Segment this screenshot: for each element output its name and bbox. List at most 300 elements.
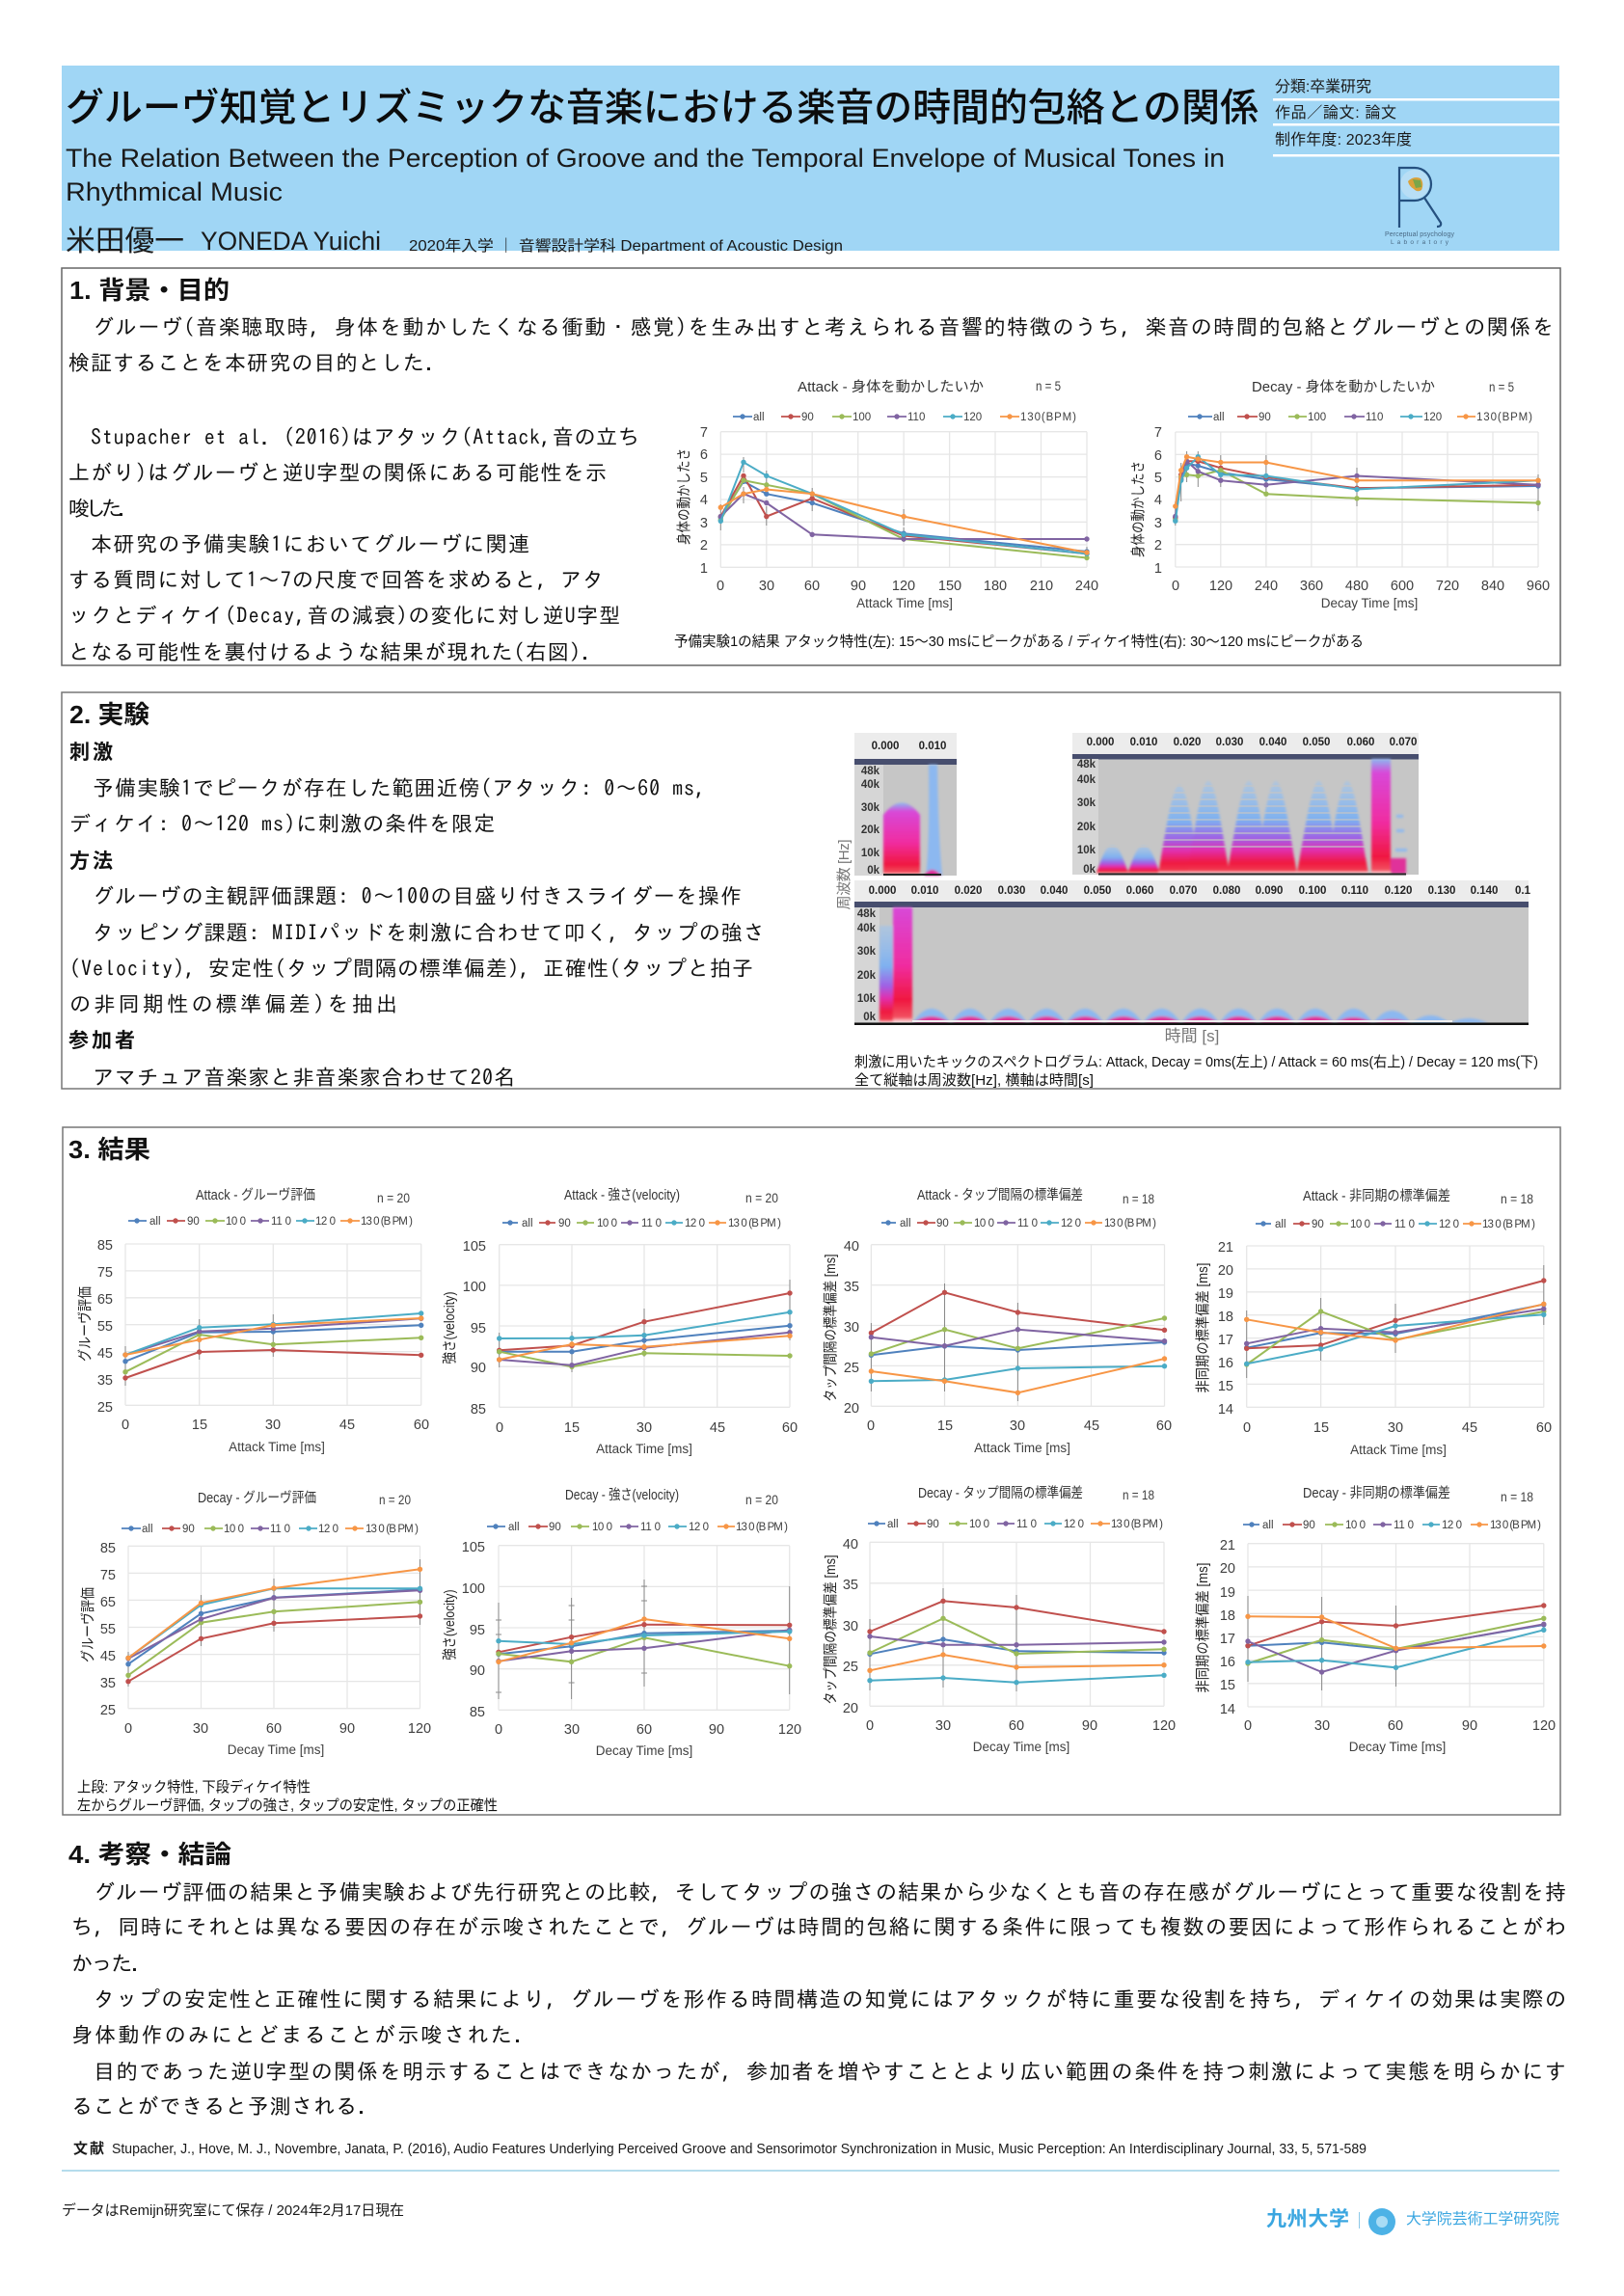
line chart: decay pilot: 110 xyxy=(1366,412,1383,423)
text block: discussion: 身体動作のみにとどまることが示唆された. xyxy=(71,2024,525,2045)
spectrogram: decay 120 ms: 40k xyxy=(857,923,877,934)
line chart: decay asynchrony SD: Decay - 非同期の標準偏差 xyxy=(1303,1485,1450,1501)
line chart: decay pilot: 240 xyxy=(1255,579,1278,594)
line chart: attack pilot: 2 xyxy=(700,538,708,554)
text block: discussion: 目的であった逆U字型の関係を明示することはできなかったが, 参加者を増やすこととより広い範囲の条件を持つ刺激によって実態を明らかにす xyxy=(94,2061,1566,2082)
line chart: attack pilot: Attack Time [ms] xyxy=(856,596,953,610)
text block: stimuli: 刺激 xyxy=(69,737,113,766)
spectrogram: attack 60 ms: 0.050 xyxy=(1303,737,1330,748)
line chart: attack pilot: n = 5 xyxy=(1036,378,1061,393)
line chart: decay groove rating: 90 xyxy=(339,1721,355,1737)
spectrogram: decay 120 ms: 0.070 xyxy=(1170,885,1197,897)
spectrogram: attack 60 ms: 40k xyxy=(1077,774,1096,786)
line chart: decay asynchrony SD: n = 18 xyxy=(1501,1489,1533,1504)
line chart: decay tap interval SD: all xyxy=(887,1519,899,1530)
meta list: 分類:卒業研究 xyxy=(1275,78,1371,95)
line chart: attack asynchrony SD: 16 xyxy=(1218,1356,1233,1371)
spectrogram: decay 120 ms: 0.010 xyxy=(911,885,938,897)
line chart: decay velocity: 強さ(velocity) xyxy=(442,1589,458,1661)
line chart: decay velocity: 90 xyxy=(549,1522,561,1533)
line chart: attack groove rating: 30 xyxy=(265,1418,281,1433)
line chart: attack tap interval SD: 25 xyxy=(844,1361,859,1376)
line chart: decay asynchrony SD: 20 xyxy=(1220,1561,1235,1577)
spectrogram: decay 120 ms: 48k xyxy=(857,908,877,920)
line chart: attack groove rating: 35 xyxy=(97,1373,113,1389)
line chart: decay velocity: 10 0 xyxy=(592,1522,612,1533)
line chart: decay velocity: 120 xyxy=(778,1722,801,1738)
line chart: decay groove rating: Decay Time [ms] xyxy=(228,1742,324,1757)
line chart: attack pilot: 90 xyxy=(801,412,814,423)
line chart: attack asynchrony SD: 30 xyxy=(1388,1420,1403,1436)
line chart: attack pilot: 0 xyxy=(717,579,724,594)
text block: prior research: ックとディケイ(Decay,音の減衰)の変化に対し逆U字型 xyxy=(68,605,620,626)
spectrogram: attack 60 ms: 0.030 xyxy=(1216,737,1243,748)
line chart: attack velocity: 105 xyxy=(463,1239,486,1255)
spectrogram: attack 60 ms: 10k xyxy=(1077,845,1096,856)
line chart: attack groove rating: 45 xyxy=(97,1346,113,1362)
line chart: attack groove rating: 90 xyxy=(187,1216,200,1228)
line chart: attack velocity: 60 xyxy=(782,1420,798,1436)
line chart: decay pilot: n = 5 xyxy=(1489,379,1514,394)
text block: prior research: Stupacher et al. (2016)はアタック(Attack,音の立ち xyxy=(91,426,639,447)
line chart: decay velocity: 30 xyxy=(564,1722,580,1738)
line chart: decay pilot: 2 xyxy=(1154,538,1162,554)
spectrogram: decay 120 ms: 0.060 xyxy=(1126,885,1153,897)
line chart: decay asynchrony SD: 30 xyxy=(1314,1718,1330,1734)
line chart: attack velocity: 15 xyxy=(564,1420,580,1436)
spectrogram: decay 120 ms: 0k xyxy=(863,1012,877,1023)
line chart: attack pilot: 150 xyxy=(938,579,961,594)
line chart: decay groove rating: 30 xyxy=(193,1721,208,1737)
heading: section 3: 3. 結果 xyxy=(68,1135,150,1164)
line chart: attack groove rating: n = 20 xyxy=(377,1190,410,1205)
line chart: decay groove rating: 75 xyxy=(100,1568,116,1583)
line chart: attack velocity: 12 0 xyxy=(685,1218,705,1229)
line chart: attack velocity: Attack - 強さ(velocity) xyxy=(564,1187,680,1203)
spectrogram: decay 120 ms: 0.090 xyxy=(1256,885,1283,897)
line chart: attack pilot: 110 xyxy=(907,412,925,423)
spectrogram: decay 120 ms: 0.030 xyxy=(998,885,1025,897)
line chart: attack pilot: 240 xyxy=(1075,579,1098,594)
author line: 2020年入学 ｜ 音響設計学科 Department of Acoustic Design xyxy=(409,237,843,255)
line chart: decay asynchrony SD: 12 0 xyxy=(1442,1520,1462,1531)
line chart: attack groove rating: 60 xyxy=(414,1418,429,1433)
line chart: attack tap interval SD: 11 0 xyxy=(1017,1218,1038,1229)
line chart: decay asynchrony SD: 10 0 xyxy=(1345,1520,1366,1531)
line chart: decay asynchrony SD: 90 xyxy=(1462,1718,1477,1734)
line chart: decay pilot xyxy=(1130,379,1550,610)
spectrogram: decay 120 ms: 0.000 xyxy=(869,885,896,897)
spectrogram: decay 120 ms: 0.100 xyxy=(1299,885,1326,897)
line chart: attack velocity: 強さ(velocity) xyxy=(442,1292,458,1364)
line chart: decay tap interval SD: n = 18 xyxy=(1123,1487,1154,1502)
author line xyxy=(66,217,843,259)
line chart: attack tap interval SD: 40 xyxy=(844,1239,859,1255)
author line: 米田優一 xyxy=(66,217,184,259)
spectrogram: attack decay 0 ms: 40k xyxy=(861,779,880,791)
english subtitle: The Relation Between the Perception of Groove and the Temporal Envelope of Musical Tones in xyxy=(66,144,1225,173)
spectrogram: attack 60 ms: 0.000 xyxy=(1087,737,1114,748)
meta list: 作品／論文: 論文 xyxy=(1275,104,1396,122)
line chart: attack groove rating: 13 0 (B PM ) xyxy=(361,1216,413,1228)
line chart: decay velocity: 90 xyxy=(709,1722,724,1738)
line chart: decay pilot: all xyxy=(1213,412,1225,423)
line chart: attack pilot: 90 xyxy=(851,579,866,594)
line chart: attack asynchrony SD: 21 xyxy=(1218,1240,1233,1256)
text block: discussion: タップの安定性と正確性に関する結果により, グルーヴを形作る時間構造の知覚にはアタックが特に重要な役割を持ち, ディケイの効果は実際の xyxy=(94,1988,1566,2010)
icon: Kyushu University logo: 九州大学 xyxy=(1266,2203,1349,2232)
spectrogram: decay 120 ms: 0.1 xyxy=(1515,885,1531,897)
line chart: attack groove rating: 10 0 xyxy=(226,1216,246,1228)
line chart: attack asynchrony SD: 0 xyxy=(1243,1420,1251,1436)
line chart: decay asynchrony SD: 0 xyxy=(1244,1718,1252,1734)
line chart: attack pilot: 身体の動かしたさ xyxy=(676,448,692,545)
line chart: decay groove rating: グルーヴ評価 xyxy=(80,1587,96,1662)
line chart: attack pilot: 130(BPM) xyxy=(1020,412,1076,423)
text block: prior research: する質問に対して1〜7の尺度で回答を求めると, アタ xyxy=(68,569,604,590)
text block: discussion xyxy=(71,1881,1566,2117)
line chart: attack velocity: 10 0 xyxy=(597,1218,617,1229)
line chart: decay velocity xyxy=(442,1487,801,1758)
line chart: decay groove rating: n = 20 xyxy=(379,1492,411,1507)
line chart: attack velocity xyxy=(442,1187,798,1456)
panel: 1 background and purpose xyxy=(62,268,1560,665)
line chart: decay tap interval SD: 40 xyxy=(843,1537,858,1553)
line chart: decay groove rating: 25 xyxy=(100,1703,116,1718)
line chart: decay pilot: 5 xyxy=(1154,471,1162,486)
panel: 3 results xyxy=(63,1127,1560,1815)
line chart: attack pilot: 100 xyxy=(853,412,871,423)
line chart: decay pilot: 4 xyxy=(1154,493,1162,508)
line chart: decay tap interval SD: 30 xyxy=(935,1718,951,1734)
heading: section 4: 4. 考察・結論 xyxy=(68,1840,231,1869)
line chart: attack velocity: 11 0 xyxy=(641,1218,662,1229)
line chart: attack pilot: all xyxy=(753,412,765,423)
spectrogram: attack 60 ms: 30k xyxy=(1077,797,1096,809)
line chart: decay velocity: n = 20 xyxy=(745,1492,778,1507)
line chart: decay velocity: 95 xyxy=(470,1623,485,1638)
line chart: attack asynchrony SD: 11 0 xyxy=(1394,1219,1415,1230)
line chart: attack asynchrony SD: 非同期の標準偏差 [ms] xyxy=(1195,1263,1211,1392)
line chart: attack pilot: 7 xyxy=(700,425,708,441)
line chart: decay groove rating: 13 0 (B PM ) xyxy=(365,1524,419,1535)
line chart: attack tap interval SD: 45 xyxy=(1084,1418,1099,1434)
spectrogram: decay 120 ms: 10k xyxy=(857,993,877,1005)
text block: participants xyxy=(68,1025,515,1088)
line chart: decay velocity: 0 xyxy=(495,1722,502,1738)
english subtitle xyxy=(66,144,1225,206)
line chart: attack groove rating: 75 xyxy=(97,1265,113,1281)
line chart: decay asynchrony SD: 21 xyxy=(1220,1538,1235,1553)
line chart: decay groove rating: 0 xyxy=(124,1721,132,1737)
references: Stupacher, J., Hove, M. J., Novembre, Janata, P. (2016), Audio Features Underlying Perceived Groove and Sensorimotor Synchronization in Music, Music Perception: An Interdisciplinary Journal, 33, 5, 571-589 xyxy=(112,2141,1367,2157)
line chart: attack velocity: 100 xyxy=(463,1280,486,1295)
line chart: decay asynchrony SD: 19 xyxy=(1220,1585,1235,1601)
line chart: decay tap interval SD: 20 xyxy=(843,1701,858,1716)
caption: spectrogram: 全て縦軸は周波数[Hz], 横軸は時間[s] xyxy=(854,1072,1094,1089)
line chart: decay asynchrony SD: 90 xyxy=(1303,1520,1315,1531)
spectrogram: decay 120 ms: 0.110 xyxy=(1341,885,1368,897)
line chart: attack tap interval SD: 12 0 xyxy=(1061,1218,1081,1229)
panel: 2 experiment xyxy=(62,692,1560,1089)
spectrogram: attack decay 0 ms: 48k xyxy=(861,766,880,777)
line chart: attack asynchrony SD: 15 xyxy=(1218,1379,1233,1394)
line chart: attack asynchrony SD: 17 xyxy=(1218,1333,1233,1348)
spectrogram: attack decay 0 ms: 0k xyxy=(867,865,880,877)
spectrogram: decay 120 ms: 0.050 xyxy=(1084,885,1111,897)
line chart: decay groove rating: 85 xyxy=(100,1541,116,1556)
line chart: attack asynchrony SD: 13 0 (B PM ) xyxy=(1482,1219,1535,1230)
spectrogram: attack 60 ms: 48k xyxy=(1077,759,1096,770)
text block: discussion: ることができると予測される. xyxy=(71,2095,368,2117)
text block: method: 方法 xyxy=(69,846,113,875)
line chart: decay asynchrony SD: 非同期の標準偏差 [ms] xyxy=(1195,1562,1211,1693)
line chart: attack groove rating xyxy=(77,1187,429,1454)
spectrogram: attack decay 0 ms: 0.010 xyxy=(919,741,946,752)
spectrogram: attack 60 ms: 20k xyxy=(1077,822,1096,833)
text block: purpose xyxy=(68,316,1554,373)
line chart: attack pilot: 180 xyxy=(984,579,1007,594)
line chart: decay tap interval SD: 90 xyxy=(1082,1718,1097,1734)
line chart: attack tap interval SD xyxy=(823,1187,1172,1455)
line chart: attack groove rating: all xyxy=(149,1216,161,1228)
line chart: decay asynchrony SD: all xyxy=(1262,1520,1274,1531)
line chart: decay tap interval SD: 90 xyxy=(927,1519,939,1530)
line chart: decay groove rating: 55 xyxy=(100,1622,116,1637)
line chart: attack groove rating: グルーヴ評価 xyxy=(77,1286,94,1362)
meta list xyxy=(1273,78,1559,156)
line chart: decay asynchrony SD: 17 xyxy=(1220,1632,1235,1647)
line chart: decay groove rating xyxy=(80,1490,431,1757)
text block: prior research: 唆した. xyxy=(68,498,128,519)
line chart: attack tap interval SD: 15 xyxy=(937,1418,953,1434)
author line: YONEDA Yuichi xyxy=(201,227,381,256)
line chart: decay asynchrony SD: 15 xyxy=(1220,1678,1235,1693)
line chart: decay velocity: 60 xyxy=(636,1722,652,1738)
line chart: decay groove rating: 45 xyxy=(100,1649,116,1664)
line chart: attack tap interval SD: タップ間隔の標準偏差 [ms] xyxy=(823,1254,839,1402)
spectrogram: decay 120 ms: 20k xyxy=(857,970,877,982)
icon: Kyushu University logo: 大学院芸術工学研究院 xyxy=(1406,2210,1559,2228)
spectrogram: decay 120 ms xyxy=(854,880,1531,1025)
line chart: decay asynchrony SD: 60 xyxy=(1388,1718,1403,1734)
spectrogram: attack decay 0 ms: 0.000 xyxy=(872,741,899,752)
line chart: attack tap interval SD: 0 xyxy=(867,1418,875,1434)
spectrogram: attack 60 ms: 0.060 xyxy=(1347,737,1374,748)
line chart: decay groove rating: all xyxy=(142,1524,153,1535)
text block: prior research: 上がり)はグルーヴと逆U字型の関係にある可能性を示 xyxy=(68,462,607,483)
english subtitle: Rhythmical Music xyxy=(66,177,283,206)
line chart: decay asynchrony SD: 18 xyxy=(1220,1608,1235,1624)
line chart: attack tap interval SD: 60 xyxy=(1156,1418,1172,1434)
line chart: decay pilot: 6 xyxy=(1154,448,1162,464)
line chart: attack groove rating: 45 xyxy=(339,1418,355,1433)
line chart: attack pilot: 30 xyxy=(759,579,774,594)
line chart: attack asynchrony SD: all xyxy=(1275,1219,1286,1230)
line chart: decay asynchrony SD: 16 xyxy=(1220,1655,1235,1670)
line chart: attack velocity: 85 xyxy=(471,1402,486,1418)
spectrogram: attack 60 ms: 0.070 xyxy=(1390,737,1417,748)
line chart: decay pilot: Decay Time [ms] xyxy=(1321,596,1418,610)
line chart: attack asynchrony SD: 45 xyxy=(1462,1420,1477,1436)
icon: laboratory logo xyxy=(1385,168,1454,246)
spectrogram: decay 120 ms: 0.140 xyxy=(1471,885,1498,897)
line chart: decay tap interval SD: 30 xyxy=(843,1619,858,1634)
line chart: attack groove rating: Attack - グルーヴ評価 xyxy=(196,1187,315,1203)
line chart: attack pilot: 6 xyxy=(700,447,708,463)
spectrogram: decay 120 ms: 0.130 xyxy=(1428,885,1455,897)
text block: stimuli: ディケイ: 0〜120 ms)に刺激の条件を限定 xyxy=(69,813,495,834)
line chart: decay groove rating: Decay - グルーヴ評価 xyxy=(198,1490,316,1506)
text block: discussion: かった. xyxy=(71,1953,142,1974)
line chart: decay pilot: 480 xyxy=(1345,579,1368,594)
line chart: attack asynchrony SD: 20 xyxy=(1218,1263,1233,1279)
line chart: attack asynchrony SD: 90 xyxy=(1312,1219,1324,1230)
spectrogram: attack 60 ms: 0.040 xyxy=(1259,737,1286,748)
line chart: decay tap interval SD xyxy=(823,1485,1176,1754)
line chart: attack groove rating: 11 0 xyxy=(271,1216,291,1228)
line chart: attack pilot: 120 xyxy=(963,412,982,423)
line chart: decay velocity: 85 xyxy=(470,1705,485,1720)
text block: prior research xyxy=(68,426,639,662)
line chart: attack pilot: Attack - 身体を動かしたいか xyxy=(798,379,984,395)
text block: method: グルーヴの主観評価課題: 0〜100の目盛り付きスライダーを操作 xyxy=(93,885,742,906)
line chart: decay pilot: 120 xyxy=(1423,412,1442,423)
caption: spectrogram: 刺激に用いたキックのスペクトログラム: Attack, Decay = 0ms(左上) / Attack = 60 ms(右上) / Decay = 120 ms(下) xyxy=(854,1054,1538,1070)
line chart: attack tap interval SD: 90 xyxy=(936,1218,949,1229)
spectrogram: decay 120 ms: 0.080 xyxy=(1213,885,1240,897)
line chart: attack tap interval SD: 13 0 (B PM ) xyxy=(1104,1218,1156,1229)
line chart: attack velocity: 0 xyxy=(496,1420,503,1436)
spectrogram: attack decay 0 ms xyxy=(854,733,957,877)
spectrogram: attack 60 ms: 0.010 xyxy=(1130,737,1157,748)
heading: section 1: 1. 背景・目的 xyxy=(69,276,230,305)
text block: method xyxy=(69,846,765,1014)
spectrogram: attack decay 0 ms: 10k xyxy=(861,848,880,859)
caption: pilot result: 予備実験1の結果 アタック特性(左): 15〜30 msにピークがある / ディケイ特性(右): 30〜120 msにピークがある xyxy=(674,633,1364,650)
line chart: decay tap interval SD: 60 xyxy=(1009,1718,1024,1734)
line chart: attack pilot xyxy=(676,378,1098,610)
header band xyxy=(62,66,1559,259)
spectrogram: attack 60 ms xyxy=(1072,733,1419,876)
line chart: decay groove rating: 10 0 xyxy=(224,1524,244,1535)
line chart: decay asynchrony SD xyxy=(1195,1485,1556,1754)
line chart: attack velocity: 45 xyxy=(710,1420,725,1436)
line chart: attack asynchrony SD: Attack Time [ms] xyxy=(1350,1443,1447,1457)
line chart: decay tap interval SD: タップ間隔の標準偏差 [ms] xyxy=(823,1554,839,1705)
line chart: attack asynchrony SD: 12 0 xyxy=(1439,1219,1459,1230)
caption: results: 上段: アタック特性, 下段ディケイ特性 xyxy=(77,1778,311,1796)
text block: method: の非同期性の標準偏差)を抽出 xyxy=(69,993,397,1014)
axis label: frequency: 周波数 [Hz] xyxy=(836,839,853,910)
line chart: decay velocity: 90 xyxy=(470,1663,485,1679)
line chart: decay velocity: 12 0 xyxy=(689,1522,709,1533)
line chart: attack groove rating: 15 xyxy=(192,1418,207,1433)
line chart: decay asynchrony SD: 11 0 xyxy=(1394,1520,1414,1531)
line chart: decay groove rating: 60 xyxy=(266,1721,282,1737)
line chart: attack pilot: 120 xyxy=(892,579,915,594)
line chart: decay asynchrony SD: Decay Time [ms] xyxy=(1349,1740,1446,1754)
text block: participants: 参加者 xyxy=(68,1025,135,1054)
line chart: decay tap interval SD: 11 0 xyxy=(1016,1519,1037,1530)
line chart: decay pilot: 360 xyxy=(1300,579,1323,594)
line chart: attack groove rating: 65 xyxy=(97,1292,113,1308)
spectrogram: attack 60 ms: 0.020 xyxy=(1174,737,1201,748)
line chart: attack asynchrony SD: 14 xyxy=(1218,1402,1233,1418)
line chart: attack tap interval SD: 35 xyxy=(844,1280,859,1295)
line chart: attack tap interval SD: all xyxy=(900,1218,911,1229)
text block: discussion: グルーヴ評価の結果と予備実験および先行研究との比較, そしてタップの強さの結果から少なくとも音の存在感がグルーヴにとって重要な役割を持 xyxy=(94,1881,1566,1903)
line chart: attack tap interval SD: Attack - タップ間隔の標準偏差 xyxy=(917,1187,1083,1203)
spectrogram: attack decay 0 ms: 30k xyxy=(861,802,880,814)
line chart: attack tap interval SD: 20 xyxy=(844,1401,859,1417)
line chart: decay tap interval SD: Decay - タップ間隔の標準偏差 xyxy=(918,1485,1083,1501)
line chart: decay asynchrony SD: 14 xyxy=(1220,1702,1235,1717)
line chart: attack pilot: 5 xyxy=(700,471,708,486)
line chart: decay tap interval SD: 10 0 xyxy=(969,1519,989,1530)
line chart: attack pilot: 1 xyxy=(700,561,708,577)
spectrogram: attack decay 0 ms: 20k xyxy=(861,824,880,836)
line chart: decay tap interval SD: 0 xyxy=(866,1718,874,1734)
line chart: attack velocity: 13 0 (B PM ) xyxy=(728,1218,781,1229)
text block: participants: アマチュア音楽家と非音楽家合わせて20名 xyxy=(93,1067,515,1088)
caption: spectrogram xyxy=(854,1054,1538,1089)
line chart: attack asynchrony SD: 15 xyxy=(1313,1420,1329,1436)
line chart: attack pilot: 210 xyxy=(1030,579,1053,594)
line chart: decay groove rating: 12 0 xyxy=(318,1524,338,1535)
icon: laboratory logo: L a b o r a t o r y xyxy=(1391,239,1449,246)
line chart: decay tap interval SD: 13 0 (B PM ) xyxy=(1111,1519,1163,1530)
line chart: decay velocity: 11 0 xyxy=(640,1522,661,1533)
line chart: attack tap interval SD: 30 xyxy=(1010,1418,1025,1434)
axis label: time: 時間 [s] xyxy=(1165,1027,1219,1045)
line chart: decay groove rating: 90 xyxy=(182,1524,195,1535)
line chart: attack groove rating: 55 xyxy=(97,1319,113,1335)
spectrogram: attack 60 ms: 0k xyxy=(1083,864,1096,876)
icon: laboratory logo: Perceptual psychology xyxy=(1385,231,1454,238)
line chart: attack groove rating: 25 xyxy=(97,1400,113,1416)
text block: prior research: 本研究の予備実験1においてグルーヴに関連 xyxy=(91,533,529,554)
line chart: decay asynchrony SD: 13 0 (B PM ) xyxy=(1490,1520,1541,1531)
line chart: attack velocity: 95 xyxy=(471,1321,486,1337)
line chart: decay groove rating: 11 0 xyxy=(270,1524,290,1535)
line chart: decay velocity: 13 0 (B PM ) xyxy=(736,1522,788,1533)
line chart: attack pilot: 4 xyxy=(700,493,708,508)
line chart: attack tap interval SD: Attack Time [ms] xyxy=(974,1441,1070,1455)
text block: purpose: グルーヴ(音楽聴取時, 身体を動かしたくなる衝動・感覚)を生み出すと考えられる音響的特徴のうち, 楽音の時間的包絡とグルーヴとの関係を xyxy=(93,316,1554,338)
line chart: attack tap interval SD: 30 xyxy=(844,1320,859,1336)
line chart: attack velocity: 30 xyxy=(636,1420,652,1436)
line chart: attack tap interval SD: n = 18 xyxy=(1123,1191,1154,1206)
line chart: decay velocity: Decay Time [ms] xyxy=(596,1743,692,1758)
line chart: decay pilot: 960 xyxy=(1527,579,1550,594)
line chart: decay tap interval SD: 12 0 xyxy=(1064,1519,1084,1530)
line chart: attack asynchrony SD: 18 xyxy=(1218,1310,1233,1325)
spectrogram: decay 120 ms: 0.120 xyxy=(1385,885,1412,897)
line chart: decay asynchrony SD: 120 xyxy=(1532,1718,1556,1734)
line chart: decay tap interval SD: 35 xyxy=(843,1578,858,1593)
line chart: decay pilot: 840 xyxy=(1481,579,1504,594)
line chart: attack tap interval SD: 10 0 xyxy=(974,1218,994,1229)
line chart: decay groove rating: 120 xyxy=(408,1721,431,1737)
text block: method: (Velocity), 安定性(タップ間隔の標準偏差), 正確性(タップと拍子 xyxy=(69,958,753,979)
section 4: discussion and conclusion xyxy=(68,1840,1566,2117)
line chart: attack groove rating: 0 xyxy=(122,1418,129,1433)
line chart: decay pilot: 3 xyxy=(1154,516,1162,531)
references: 文献 xyxy=(73,2140,104,2157)
line chart: attack velocity: Attack Time [ms] xyxy=(596,1442,692,1456)
line chart: decay pilot: 720 xyxy=(1436,579,1459,594)
